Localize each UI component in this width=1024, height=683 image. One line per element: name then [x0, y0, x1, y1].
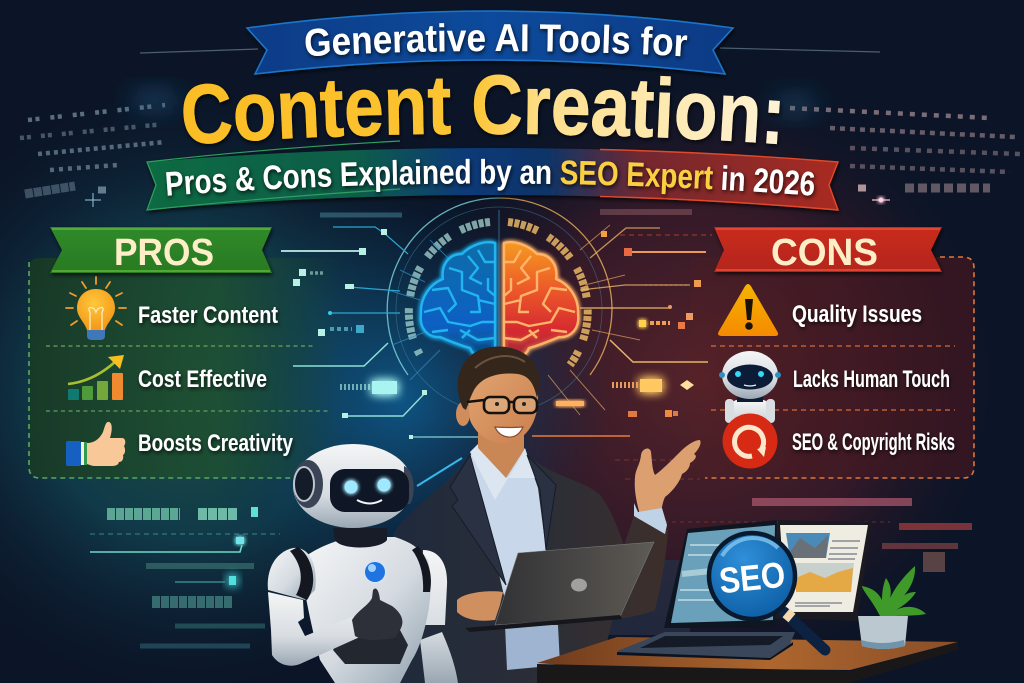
- lapels: [450, 455, 556, 585]
- text: boosts creativity: Boosts Creativity: [138, 430, 294, 457]
- typing hand: [457, 591, 503, 621]
- icon: growth chart: [68, 355, 124, 400]
- robot smile: [357, 500, 382, 504]
- robot far arm: [420, 550, 458, 683]
- robot thumb-up hand: [352, 588, 402, 640]
- hair shine: [475, 356, 525, 368]
- banner: cons: CONS: [771, 232, 878, 274]
- robot visor: [330, 469, 409, 512]
- data pixel rows left: [20, 105, 165, 207]
- title line 3: Pros & Cons Explained by an SEO Expert in 2026: [165, 158, 818, 200]
- face: [466, 364, 538, 444]
- laptop base: [465, 615, 622, 632]
- panel: pros frame: [29, 258, 345, 478]
- desk: [537, 637, 958, 683]
- eyes: [495, 402, 526, 406]
- magnifier SEO: SEO: [717, 554, 787, 601]
- robot shoulder bands: [290, 546, 431, 600]
- title line 2: Content Creation:: [183, 74, 782, 148]
- text: quality issues: Quality Issues: [792, 301, 922, 328]
- icon: red refresh badge: [722, 414, 778, 468]
- laptop logo: [571, 578, 587, 592]
- ear: [456, 402, 470, 426]
- brain icon: [421, 242, 578, 359]
- right circuit lines: [532, 212, 712, 436]
- robot: assistant: [268, 444, 458, 683]
- laptop on desk: [617, 520, 795, 660]
- robot core: [363, 560, 387, 584]
- hair: [458, 347, 539, 410]
- robot shoulder: [268, 548, 316, 600]
- icon: light bulb: [66, 277, 126, 340]
- robot chest grill: [333, 630, 408, 664]
- plant in pot: [858, 566, 926, 649]
- icon: small robot: [719, 351, 781, 426]
- banner: cons: [714, 227, 942, 274]
- magnifier SEO: [709, 533, 825, 650]
- text: cost effective: Cost Effective: [138, 366, 267, 393]
- jacket: [393, 452, 668, 683]
- shirt: [470, 448, 546, 600]
- robot neck: [333, 528, 387, 548]
- title line 1: Generative AI Tools for: [304, 22, 690, 61]
- banner: pros: [50, 227, 272, 274]
- left circuit lines: [281, 215, 483, 486]
- lower left data streaks: [90, 507, 280, 646]
- robot torso: [300, 537, 431, 683]
- icon: thumbs up: [66, 422, 125, 466]
- lower right data streaks: [615, 460, 972, 572]
- robot eyes: [344, 478, 390, 494]
- banner: pros: PROS: [114, 232, 214, 274]
- robot head: [293, 444, 413, 528]
- monitor with charts: [775, 520, 872, 621]
- blue glow accents: [129, 90, 817, 115]
- neck: [478, 430, 524, 478]
- robot ear left: [293, 460, 323, 508]
- text: faster content: Faster Content: [138, 302, 278, 329]
- HUD rings behind brain: [387, 198, 640, 415]
- laptop lid: [495, 542, 654, 625]
- raised hand: [635, 440, 701, 515]
- smile: [495, 427, 523, 437]
- text: lacks human touch: Lacks Human Touch: [793, 366, 950, 393]
- person: presenter: [393, 347, 701, 683]
- glasses: [467, 397, 537, 413]
- banner: top blue: [247, 11, 733, 74]
- robot arm: [268, 592, 362, 666]
- shirt collar: [470, 440, 535, 500]
- data pixel rows right: [790, 108, 1020, 202]
- banner: subtitle: [147, 141, 838, 210]
- lower shirt: [505, 625, 560, 670]
- robot ear right: [404, 466, 414, 504]
- shirt cuff: [634, 503, 667, 534]
- icon: warning triangle: [718, 284, 778, 336]
- panel: cons frame: [690, 257, 974, 478]
